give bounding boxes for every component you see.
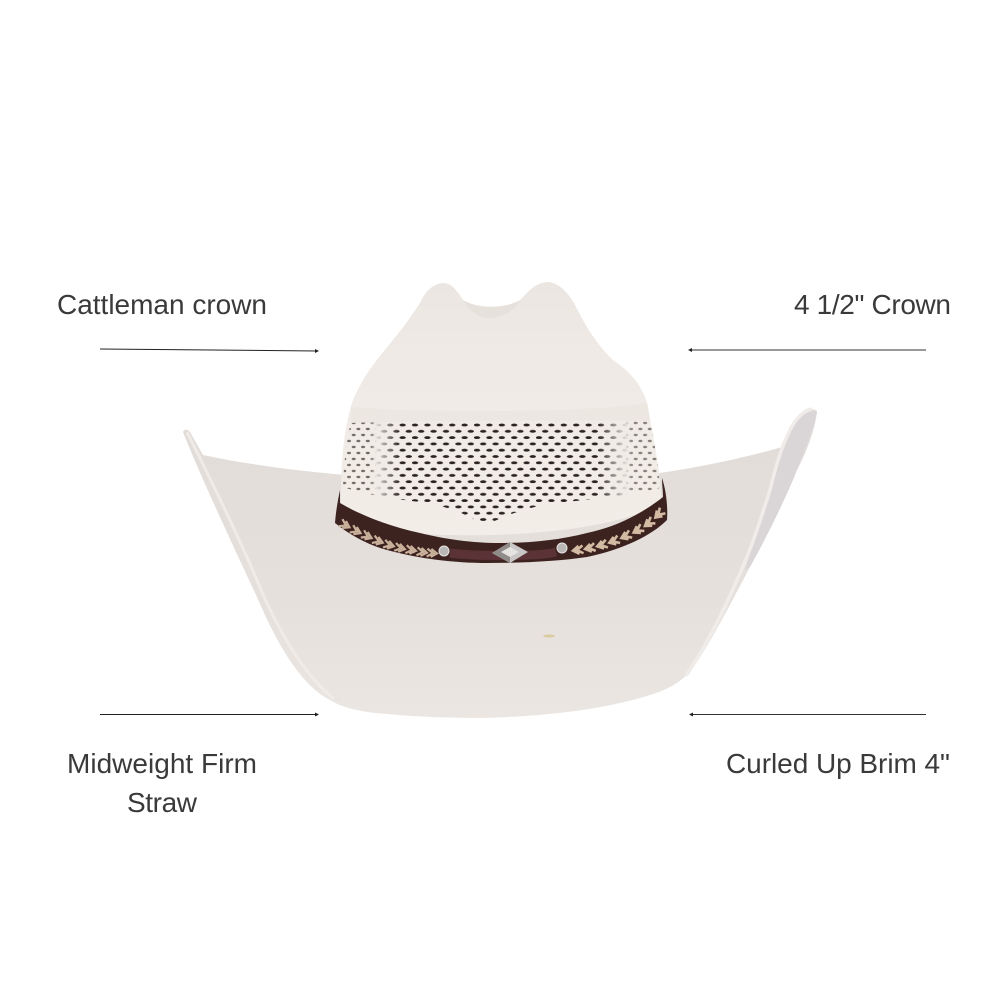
ventilation holes [343,422,660,521]
band braid left [339,519,437,557]
band leather centre [450,552,556,556]
brim stain [543,634,555,638]
label: crown height: 4 1/2" Crown [794,289,951,320]
label: Midweight Firm Straw [67,748,257,818]
arrow: Cattleman crown [100,349,319,353]
label: Midweight Firm Straw: Midweight Firm [67,748,257,779]
crown [340,282,665,535]
band braid right [572,508,665,555]
woven band above vents [351,403,650,423]
label: Curled Up Brim: Curled Up Brim 4" [726,748,950,779]
arrow: crown height [688,348,926,352]
label: Cattleman crown: Cattleman crown [57,289,267,320]
crown top dent shadow [463,300,520,318]
brim [183,409,817,718]
arrow: brim [689,712,926,716]
concho left [439,546,449,556]
right brim flap underside [745,411,817,570]
left brim rim highlight [187,432,334,699]
diamond concho [492,542,528,563]
right brim rim highlight [686,409,812,676]
hat band [335,478,667,563]
hat illustration [183,282,817,718]
concho right [557,543,567,553]
label: Midweight Firm Straw: Straw [127,787,198,818]
arrow: straw [100,712,319,716]
